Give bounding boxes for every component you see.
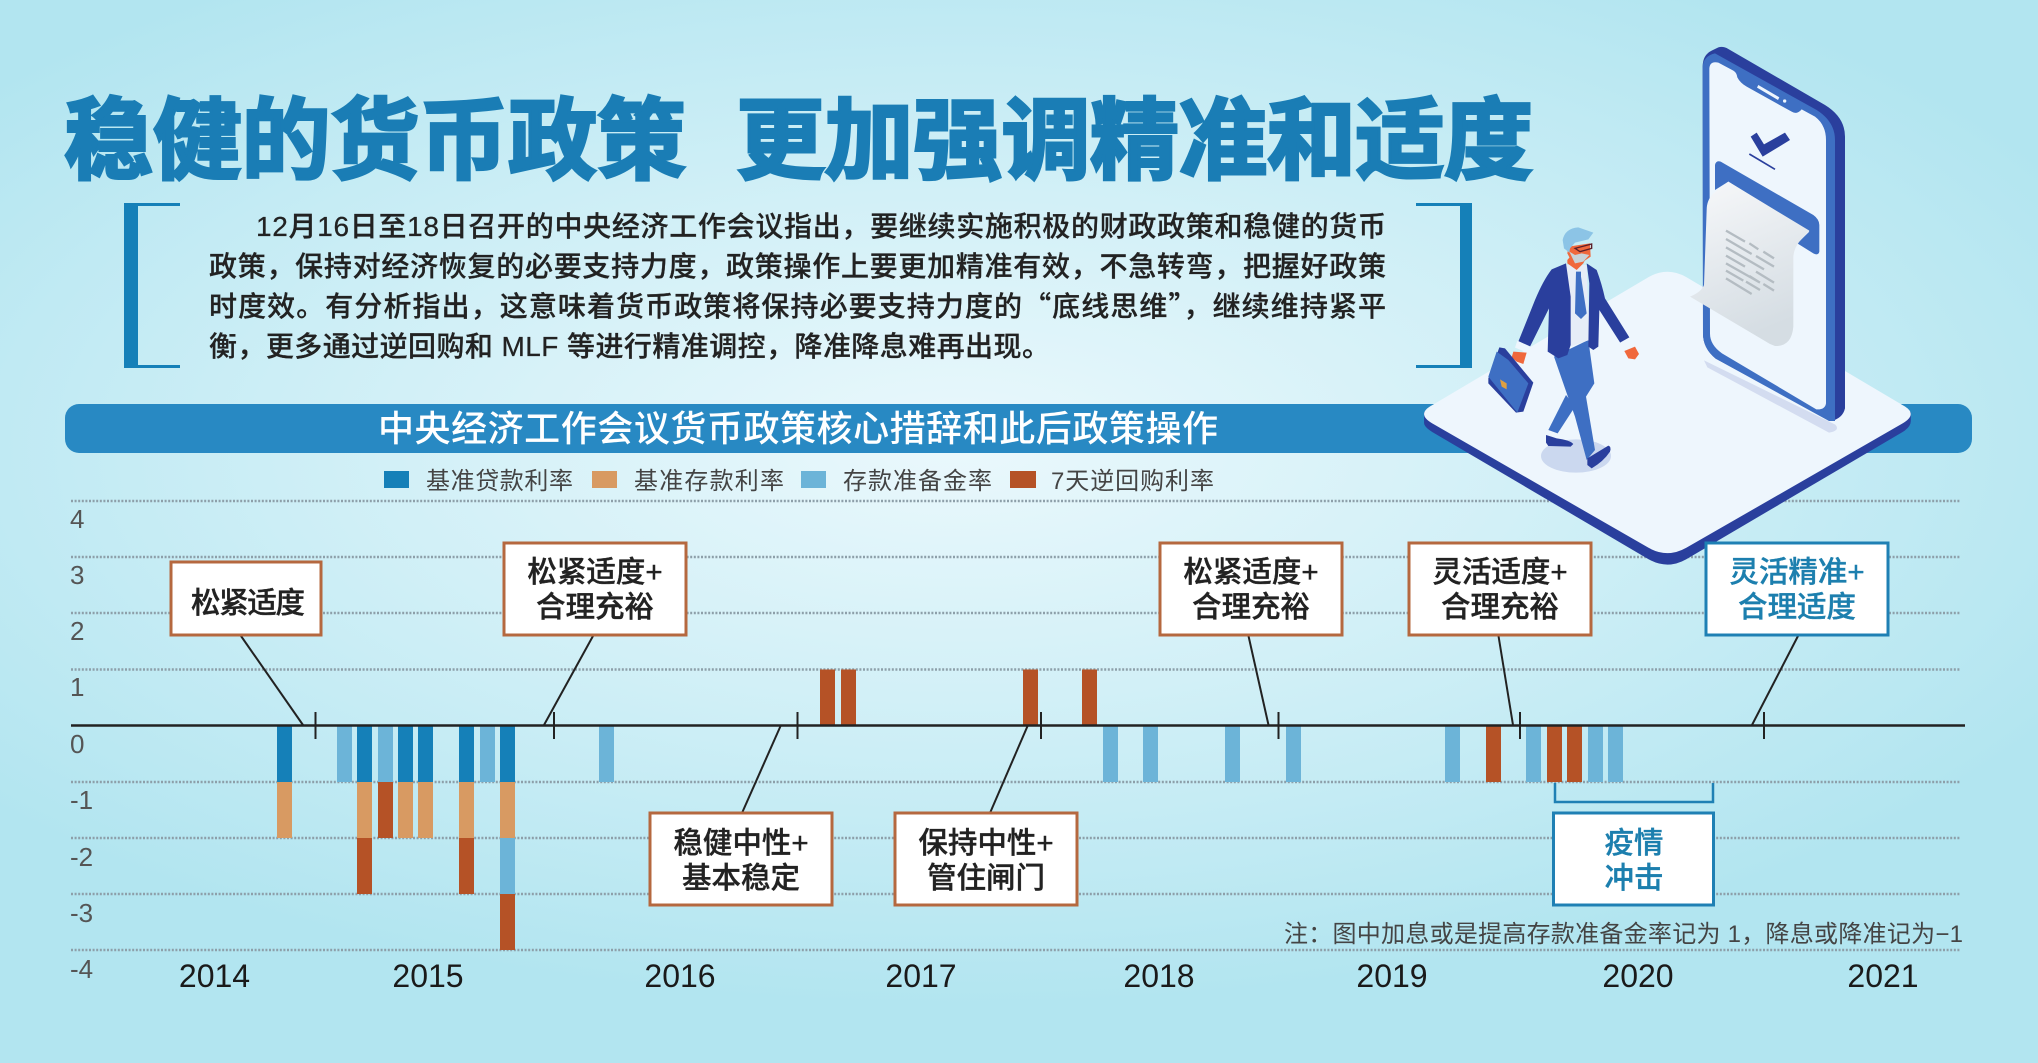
section heading bar bbox=[65, 404, 1972, 453]
callout: 2016: 稳健中性+ bbox=[673, 827, 809, 860]
callout: 2019 bbox=[1409, 543, 1591, 725]
year labels: 2014 bbox=[179, 958, 250, 994]
icon: businessman bbox=[1488, 227, 1639, 473]
printer slot bbox=[1715, 161, 1819, 254]
callout: 2018 bbox=[1160, 543, 1342, 725]
callout: 2017 bbox=[895, 725, 1077, 905]
intro text block: 时度效。有分析指出，这意味着货币政策将保持必要支持力度的“底线思维”，继续维持紧平 bbox=[209, 285, 1386, 325]
year labels: 2016 bbox=[644, 958, 716, 994]
bars: benchmark deposit rate bbox=[277, 782, 515, 838]
callout: 2016 bbox=[650, 725, 832, 905]
title: 更加强调精准和适度 bbox=[736, 91, 1533, 191]
gridlines bbox=[71, 501, 1960, 950]
callout: 2014: 松紧适度 bbox=[191, 587, 305, 620]
briefcase bbox=[1488, 347, 1533, 413]
year labels: 2019 bbox=[1356, 958, 1428, 994]
callout: 2018: 合理充裕 bbox=[1192, 591, 1310, 624]
illustration: platform bbox=[1424, 272, 1911, 565]
callout: 2020: 灵活精准+ bbox=[1729, 556, 1865, 589]
callout: 2015: 合理充裕 bbox=[536, 591, 654, 624]
intro text block: 衡，更多通过逆回购和 MLF 等进行精准调控，降准降息难再出现。 bbox=[209, 331, 1050, 362]
year labels: 2021 bbox=[1847, 958, 1919, 994]
year labels: 2017 bbox=[885, 958, 957, 994]
legend: 基准存款利率 bbox=[634, 468, 784, 495]
y axis labels: 1 bbox=[70, 672, 84, 702]
receipt paper bbox=[1690, 182, 1809, 346]
year labels: 2018 bbox=[1123, 958, 1195, 994]
legend bbox=[384, 468, 1214, 495]
year labels: 2020 bbox=[1602, 958, 1674, 994]
callout: 2018: 松紧适度+ bbox=[1183, 556, 1319, 589]
callout: 2017: 保持中性+ bbox=[918, 827, 1054, 860]
bars: benchmark lending rate bbox=[277, 725, 515, 782]
y axis labels: 4 bbox=[70, 504, 84, 534]
year labels bbox=[179, 958, 1919, 994]
title: 稳健的货币政策 bbox=[64, 91, 686, 191]
intro text block bbox=[209, 211, 1386, 362]
legend: 基准贷款利率 bbox=[426, 468, 573, 495]
section heading bar: 中央经济工作会议货币政策核心措辞和此后政策操作 bbox=[378, 408, 1218, 449]
y axis labels: 2 bbox=[70, 616, 84, 646]
callout: 2014 bbox=[171, 562, 321, 725]
callout: 2020 bbox=[1706, 543, 1888, 725]
zero axis and ticks bbox=[71, 712, 1965, 739]
callout: 2017: 管住闸门 bbox=[927, 862, 1045, 895]
icon: phone bbox=[1690, 47, 1845, 433]
callout: 2015 bbox=[504, 543, 686, 725]
y axis labels: 3 bbox=[70, 560, 84, 590]
y axis labels: 0 bbox=[70, 729, 84, 759]
y axis labels: -2 bbox=[70, 842, 93, 872]
y axis labels: -1 bbox=[70, 785, 93, 815]
chart note: 注：图中加息或是提高存款准备金率记为 1，降息或降准记为−1 bbox=[1284, 921, 1963, 948]
left bracket bbox=[124, 203, 180, 368]
callout: 2019: 灵活适度+ bbox=[1432, 556, 1568, 589]
bars: 7-day reverse repo rate bbox=[357, 670, 1582, 950]
y axis labels: -3 bbox=[70, 898, 93, 928]
callout: 2015: 松紧适度+ bbox=[527, 556, 663, 589]
legend: 7天逆回购利率 bbox=[1051, 468, 1214, 495]
right bracket bbox=[1416, 203, 1472, 368]
callout: pandemic shock: 冲击 bbox=[1604, 862, 1664, 895]
callout: pandemic shock: 疫情 bbox=[1604, 827, 1664, 860]
check mark bbox=[1751, 133, 1790, 157]
callout: 2020: 合理适度 bbox=[1738, 591, 1856, 624]
chart bbox=[70, 501, 1965, 994]
intro text block: 政策，保持对经济恢复的必要支持力度，政策操作上要更加精准有效，不急转弯，把握好政策 bbox=[209, 251, 1386, 282]
legend: 存款准备金率 bbox=[843, 468, 992, 495]
y axis labels: -4 bbox=[70, 954, 93, 984]
callout: pandemic shock bbox=[1554, 783, 1714, 905]
intro text block: 12月16日至18日召开的中央经济工作会议指出，要继续实施积极的财政政策和稳健的货币 bbox=[256, 211, 1386, 242]
y axis labels bbox=[70, 504, 93, 984]
bars: reserve requirement ratio bbox=[337, 725, 1623, 894]
title bbox=[64, 91, 1533, 191]
callout: 2016: 基本稳定 bbox=[682, 862, 800, 895]
callout: 2019: 合理充裕 bbox=[1441, 591, 1559, 624]
year labels: 2015 bbox=[392, 958, 464, 994]
